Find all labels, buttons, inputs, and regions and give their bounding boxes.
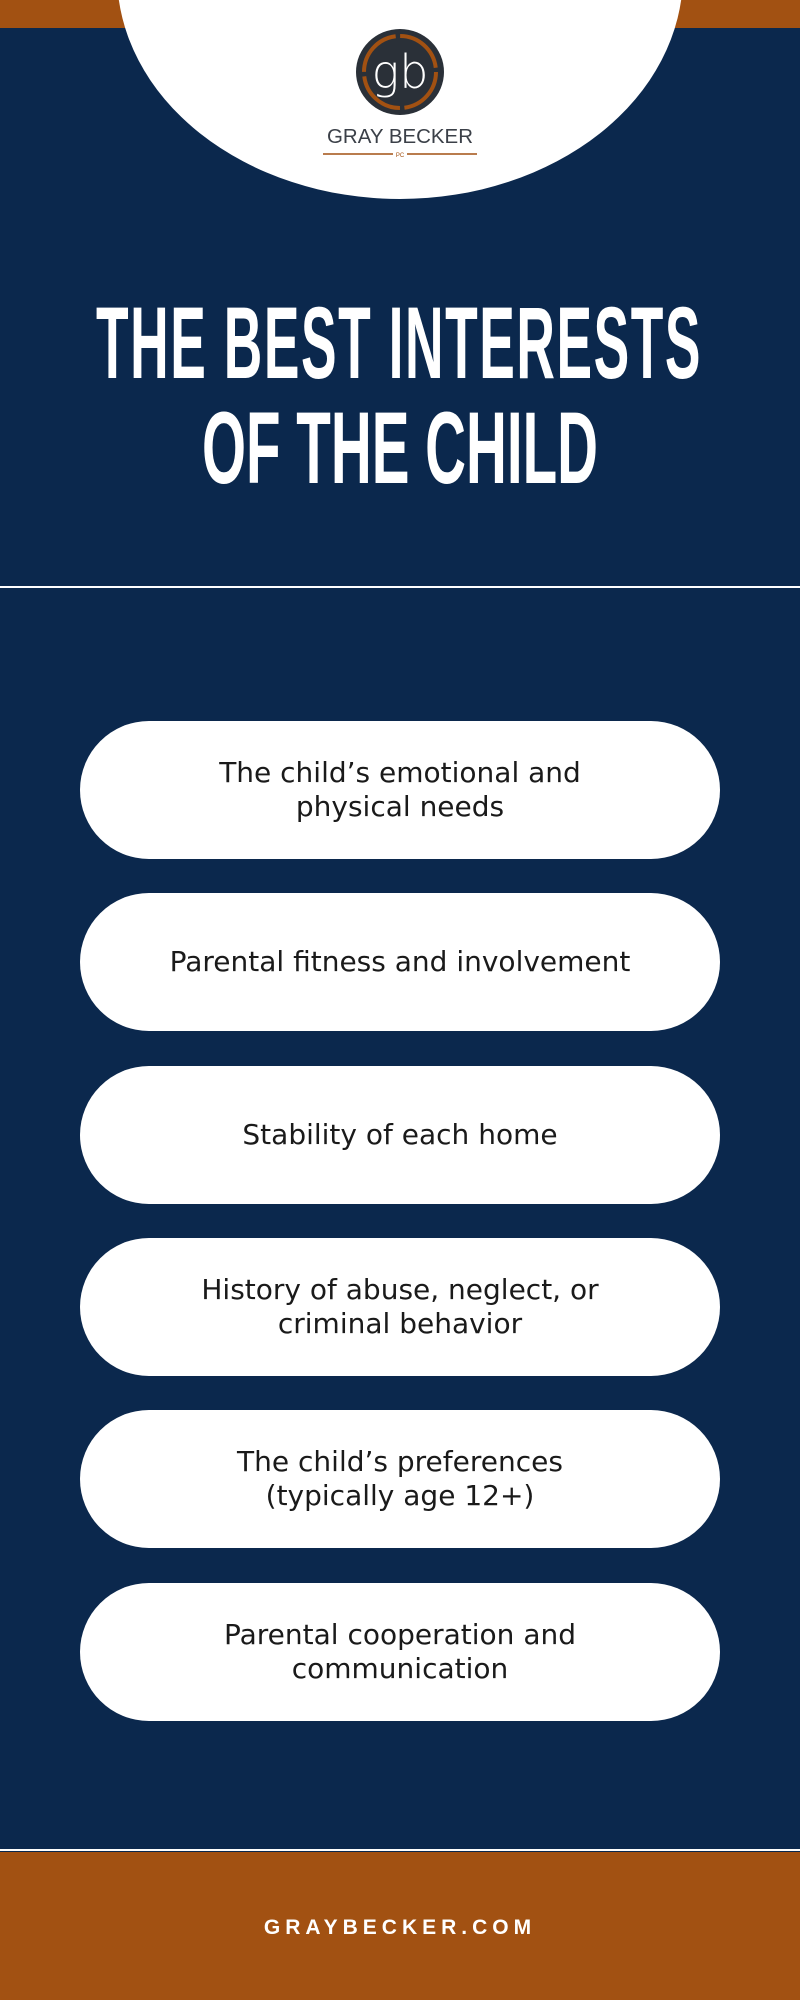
pill 6: Parental cooperation and <box>224 1618 576 1651</box>
pill 4 <box>80 1238 720 1376</box>
brand name <box>323 126 477 159</box>
brand name: PC <box>396 153 405 159</box>
pill 2 <box>80 893 720 1031</box>
brand name: GRAY BECKER <box>327 126 473 148</box>
pill 5: The child’s preferences <box>237 1445 563 1478</box>
top orange band <box>0 0 800 28</box>
pill 4: criminal behavior <box>278 1307 522 1340</box>
logo <box>323 29 477 159</box>
footer <box>0 1852 800 2000</box>
pill 1: physical needs <box>296 790 504 823</box>
title <box>96 290 702 490</box>
pill 6: communication <box>292 1652 508 1685</box>
footer url: GRAYBECKER.COM <box>264 1916 536 1939</box>
white ellipse header <box>117 0 683 199</box>
pill 3: Stability of each home <box>242 1118 558 1151</box>
pill 1: The child’s emotional and <box>219 756 581 789</box>
pill 1 <box>80 721 720 859</box>
pill 6 <box>80 1583 720 1721</box>
pill 3 <box>80 1066 720 1204</box>
pill 4: History of abuse, neglect, or <box>201 1273 599 1306</box>
icon: gb monogram: gb <box>372 45 428 99</box>
icon: gb monogram <box>356 29 444 115</box>
pill 5 <box>80 1410 720 1548</box>
pill 5: (typically age 12+) <box>266 1479 534 1512</box>
pill 2: Parental fitness and involvement <box>170 945 630 978</box>
